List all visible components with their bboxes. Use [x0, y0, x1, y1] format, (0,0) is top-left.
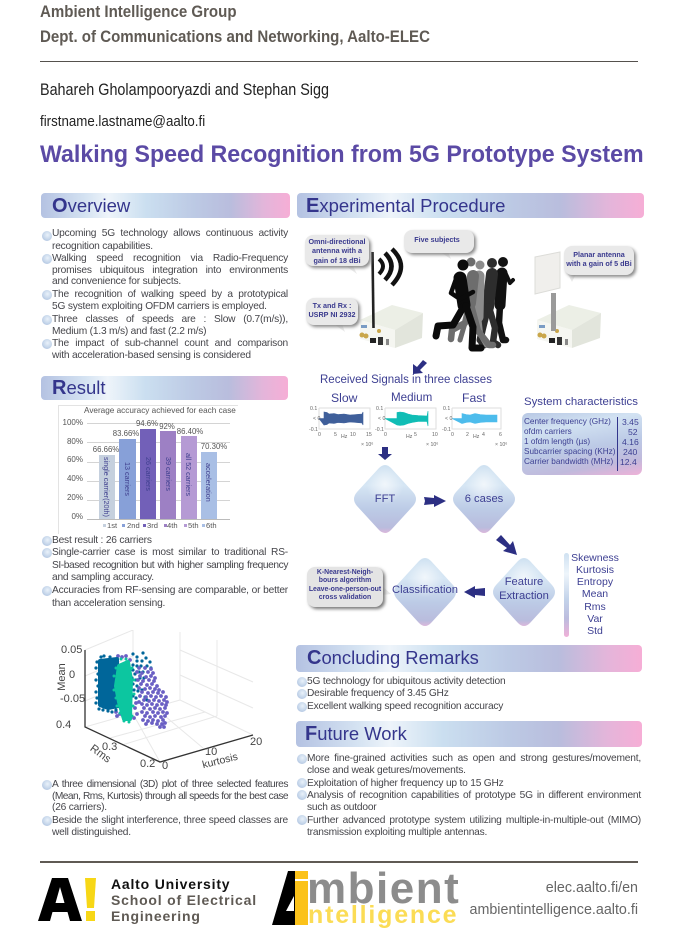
bar rotated labels: single carrier(20th) [102, 457, 111, 517]
logo: ambient intelligence [272, 864, 460, 929]
text block: overview bullets: The impact of sub-channel count and comparison [52, 338, 288, 349]
signal axes labels: < 0 [378, 416, 385, 422]
chart legend: 2nd [127, 521, 140, 530]
text block: overview bullets: and convenience for subjects. [52, 276, 181, 287]
chart title: Average accuracy achieved for each case [84, 406, 236, 415]
feature list: Kurtosis [576, 564, 614, 576]
axis labels: 10 [205, 746, 217, 758]
feature list [571, 552, 619, 637]
signal axes labels: 4 [482, 432, 485, 438]
axis labels: 0.2 [140, 758, 155, 770]
signal axes labels: Hz [341, 434, 347, 440]
chart legend: 1st [107, 521, 117, 530]
text block: scatter plot notes [42, 779, 288, 838]
text block: concluding bullets: Desirable frequency of 3.45 GHz [307, 688, 449, 699]
arrow: to received signals [413, 360, 427, 374]
logo wordmark: ambient: mbient [307, 864, 460, 913]
signal class labels: Slow [331, 391, 357, 405]
logo text: Engineering [111, 908, 201, 924]
bar value labels [93, 419, 227, 454]
chart legend: 4th [167, 521, 178, 530]
y axis labels: 60% [67, 455, 83, 464]
icon: callout tail [382, 586, 391, 595]
text block: scatter plot notes: Beside the slight interference, three speed classes are [52, 815, 288, 826]
bar value labels: 86.40% [177, 427, 203, 436]
y axis labels: 40% [67, 474, 83, 483]
text block: overview bullets: promises ubiquitous integration into environments [52, 265, 288, 276]
panel: system characteristics table [522, 413, 642, 475]
signal charts [309, 391, 508, 448]
footer links: ambientintelligence.aalto.fi [470, 902, 638, 918]
heading: received signals: Received Signals in three classes [320, 374, 492, 386]
callout: planar antenna: Planar antenna [573, 250, 625, 259]
signal axes labels: 0 [384, 432, 387, 438]
bar value labels: 70.30% [201, 442, 227, 451]
icon: wireless waves [379, 249, 401, 285]
heading: concluding remarks: Concluding Remarks [307, 647, 479, 669]
text block: future work bullets: Analysis of recognition capabilities of prototype 5G in different environment [307, 790, 641, 801]
callout: classification method: K-Nearest-Neigh- [317, 569, 373, 576]
callout: five subjects: Five subjects [414, 235, 460, 244]
panel: system characteristics table: Subcarrier spacing (KHz) [524, 447, 615, 456]
scatter: dark blue rear points [132, 653, 151, 700]
text block: overview bullets: Medium (1.3 m/s) and fast (2.2 m/s) [52, 326, 206, 337]
title: Walking Speed Recognition from 5G Prototype System [40, 141, 644, 168]
signal axes labels: × 10⁶ [495, 442, 507, 448]
diamond: FFT [354, 465, 416, 533]
feature list: Rms [584, 601, 606, 613]
logo text [111, 876, 257, 924]
feature list: Var [587, 613, 603, 625]
bar value labels: 92% [159, 422, 175, 431]
signal axes labels: 5 [334, 432, 337, 438]
scatter: dark blue points [96, 656, 118, 712]
text block: overview bullets: with acceleration-based sensing is considered [52, 350, 251, 361]
signal axes labels: 15 [366, 432, 372, 438]
heading: overview [41, 193, 290, 218]
flow labels: Classification [392, 584, 458, 596]
text block: overview bullets: Upcoming 5G technology allows continuous activity [52, 228, 288, 239]
panel: system characteristics table: ofdm carriers [524, 427, 572, 436]
flow labels: FFT [375, 493, 395, 505]
flow labels: Feature [505, 576, 543, 588]
bar value labels: 66.66% [93, 445, 119, 454]
text block: result bullets: Single-carrier case is most similar to traditional RS- [52, 547, 288, 558]
text block: scatter plot notes: (Mean, Rms, Kurtosis) through all speeds for the best case [52, 791, 288, 802]
signal axes labels: 5 [414, 432, 417, 438]
text block: result bullets [42, 535, 288, 609]
text block: future work bullets: close and weak getures/movements. [307, 765, 466, 776]
logo text: School of Electrical [111, 892, 257, 908]
footer links: elec.aalto.fi/en [546, 880, 638, 896]
text block: future work bullets: More fine-grained activities such as open and strong gestures/movement, [307, 753, 641, 764]
callout: classification method [307, 567, 383, 607]
axis labels: kurtosis [201, 751, 239, 771]
text block: overview bullets: The recognition of walking speed by a prototypical [52, 289, 288, 300]
callout: tx and rx [306, 298, 358, 325]
bar value labels: 83.66% [113, 429, 139, 438]
panel: system characteristics table: Carrier bandwidth (MHz) [524, 457, 613, 466]
flow labels: Extraction [499, 590, 549, 602]
y axis labels: 100% [63, 418, 83, 427]
bar rotated labels [102, 453, 213, 517]
signal axes labels: < 0 [445, 416, 452, 422]
callout: omni antenna: Omni-directional [308, 237, 366, 246]
panel: system characteristics table: 1 ofdm length (µs) [524, 437, 590, 446]
text block: future work bullets: transmission exploiting multiple antennas. [307, 827, 487, 838]
system characteristics title: System characteristics [524, 396, 638, 408]
text block: concluding bullets [297, 676, 505, 712]
heading: experimental procedure: Experimental Procedure [306, 195, 505, 217]
heading: experimental procedure [297, 193, 644, 218]
signal axes labels: < 0 [313, 416, 320, 422]
axis labels: 0.4 [56, 719, 71, 731]
panel: system characteristics table: 3.45 [622, 417, 639, 427]
axis labels: 0.3 [102, 741, 117, 753]
signal axes labels: 0.1 [310, 406, 317, 412]
heading: result: Result [52, 377, 106, 399]
signal axes labels [309, 406, 508, 448]
axis labels: 20 [250, 736, 262, 748]
diamond: feature extraction [493, 558, 555, 626]
panel: system characteristics table: 4.16 [622, 437, 639, 447]
device: USRP transmitter [360, 305, 423, 348]
diamond: 6 cases [453, 465, 515, 533]
flow labels [375, 493, 549, 602]
signal axes labels: 2 [466, 432, 469, 438]
callout: tx and rx: Tx and Rx : [313, 301, 351, 310]
signal axes labels: 0 [451, 432, 454, 438]
device: USRP receiver [537, 305, 601, 348]
logo text: Aalto University [111, 876, 230, 892]
group name heading: Ambient Intelligence Group [40, 2, 237, 21]
axis labels [56, 644, 262, 772]
text block: overview bullets: 5G system exploiting OFDM carriers is employed. [52, 301, 267, 312]
3D scatter plot [56, 630, 262, 772]
chart legend [107, 521, 217, 530]
logo: Aalto University [38, 876, 257, 924]
text block: scatter plot notes: A three dimensional (3D) plot of three selected features [52, 779, 288, 790]
signal class labels: Fast [462, 391, 486, 405]
scatter: purple points [116, 656, 167, 727]
waveform: fast [452, 414, 497, 424]
text block: overview bullets: Three classes of speeds are : Slow (0.7(m/s)), [52, 314, 288, 325]
signal axes labels: 0 [318, 432, 321, 438]
experimental setup illustration [304, 230, 638, 374]
arrow: feature extraction to classification [464, 586, 485, 598]
bar rotated labels: 26 carriers [144, 457, 153, 491]
text block: result bullets: and sampling accuracy. [52, 572, 154, 583]
panel: system characteristics table: 52 [628, 427, 638, 437]
signal axes labels: 10 [350, 432, 356, 438]
text block: overview bullets: recognition capabilities. [52, 241, 153, 252]
text block: overview bullets: Walking speed recognition via Radio-Frequency [52, 253, 288, 264]
icon: omni-directional antenna [372, 252, 374, 328]
signal axes labels: -0.1 [442, 427, 451, 433]
email: firstname.lastname@aalto.fi [40, 114, 205, 130]
signal axes labels: Hz [406, 434, 412, 440]
heading: result [41, 376, 288, 400]
feature list: Mean [582, 588, 608, 600]
bar chart: average accuracy: 94.6% [136, 419, 158, 428]
group name heading: Dept. of Communications and Networking, Aalto-ELEC [40, 27, 430, 46]
axis labels: -0.05 [60, 693, 85, 705]
heading: future work [296, 721, 642, 747]
y axis labels: 20% [67, 493, 83, 502]
arrow: 6 cases to feature extraction [496, 535, 517, 555]
bar rotated labels: acceleration [204, 463, 213, 502]
signal axes labels: -0.1 [309, 427, 318, 433]
panel: system characteristics table: 12.4 [620, 457, 637, 467]
signal axes labels: Hz [473, 434, 479, 440]
text block: result bullets: Accuracies from RF-sensing are comparable, or better [52, 585, 288, 596]
waveform: slow [319, 412, 363, 425]
chart legend: 5th [188, 521, 199, 530]
scatter: teal points [114, 659, 134, 722]
bar rotated labels: 39 carriers [164, 457, 173, 491]
runners silhouettes [436, 257, 513, 348]
callout: omni antenna: antenna with a [312, 246, 362, 255]
text block: overview bullets [42, 228, 288, 361]
text block: result bullets: than acceleration sensing. [52, 598, 165, 609]
axis labels: 0 [69, 669, 75, 681]
callout: classification method: cross validation [319, 594, 371, 601]
signal axes labels: × 10⁶ [361, 442, 373, 448]
y axis labels: 0% [71, 512, 83, 521]
callout: planar antenna: with a gain of 5 dBi [566, 259, 632, 268]
text block: concluding bullets: 5G technology for ubiquitous activity detection [307, 676, 505, 687]
bar rotated labels: 13 carriers [123, 462, 132, 496]
chart legend: 3rd [147, 521, 158, 530]
text block: future work bullets: Exploitation of higher frequency up to 15 GHz [307, 778, 504, 789]
arrow: FFT to 6 cases [424, 495, 446, 507]
axis labels: 0 [162, 760, 168, 772]
chart legend: 6th [206, 521, 217, 530]
icon: planar antenna [535, 252, 560, 331]
axis labels: Mean [56, 663, 68, 691]
callout: classification method: Leave-one-person-out [309, 586, 381, 593]
icon: callout tails [334, 252, 576, 332]
feature list bar [564, 553, 569, 637]
y axis labels [63, 418, 83, 521]
signal axes labels: × 10⁶ [426, 442, 438, 448]
text block: concluding bullets: Excellent walking speed recognition accuracy [307, 701, 503, 712]
callout: omni antenna: gain of 18 dBi [313, 256, 361, 265]
signal class labels [331, 391, 486, 405]
signal axes labels: 0.1 [443, 406, 450, 412]
text block: result bullets: Best result : 26 carriers [52, 535, 152, 546]
heading: overview: Overview [52, 195, 130, 217]
axis labels: 0.05 [61, 644, 82, 656]
signal class labels: Medium [391, 391, 432, 404]
callout: classification method: bours algorithm [319, 577, 371, 584]
heading: future work: Future Work [305, 723, 407, 745]
bar rotated labels: all 52 carriers [184, 453, 193, 496]
text block: future work bullets [297, 753, 642, 838]
panel: system characteristics table: Center frequency (GHz) [524, 417, 611, 426]
feature list: Entropy [577, 576, 613, 588]
diamond: classification [394, 558, 456, 626]
signal axes labels: 6 [499, 432, 502, 438]
text block: future work bullets: Further advanced prototype system utilizing multiple-in-multiple-out (MIMO) [307, 815, 641, 826]
callout: five subjects [404, 230, 474, 253]
authors: Bahareh Gholampooryazdi and Stephan Sigg [40, 81, 329, 99]
text block: scatter plot notes: well distinguished. [52, 827, 131, 838]
callout: planar antenna [564, 246, 634, 275]
signal axes labels: 10 [432, 432, 438, 438]
text block: future work bullets: such as outdoor [307, 802, 376, 813]
text block: result bullets: SI-based recognition but with higher sampling frequency [52, 560, 288, 571]
group name heading [40, 2, 430, 46]
callout: omni antenna [305, 235, 369, 266]
signal axes labels: 0.1 [376, 406, 383, 412]
signal axes labels: -0.1 [375, 427, 384, 433]
flow diagram [354, 447, 555, 626]
axis labels: Rms [88, 743, 113, 765]
flow labels: 6 cases [465, 493, 503, 505]
heading: concluding remarks [296, 645, 642, 672]
feature list: Skewness [571, 552, 619, 564]
panel: system characteristics table: 240 [623, 447, 637, 457]
logo wordmark: intelligence: ntelligence [308, 901, 458, 929]
callout: tx and rx: USRP NI 2932 [308, 310, 356, 319]
waveform: medium [385, 411, 428, 426]
feature list: Std [587, 625, 603, 637]
bar chart: average accuracy [58, 405, 238, 534]
arrow: signals to FFT [378, 447, 392, 460]
footer links [470, 880, 638, 918]
text block: scatter plot notes: (26 carriers). [52, 802, 107, 813]
y axis labels: 80% [67, 437, 83, 446]
